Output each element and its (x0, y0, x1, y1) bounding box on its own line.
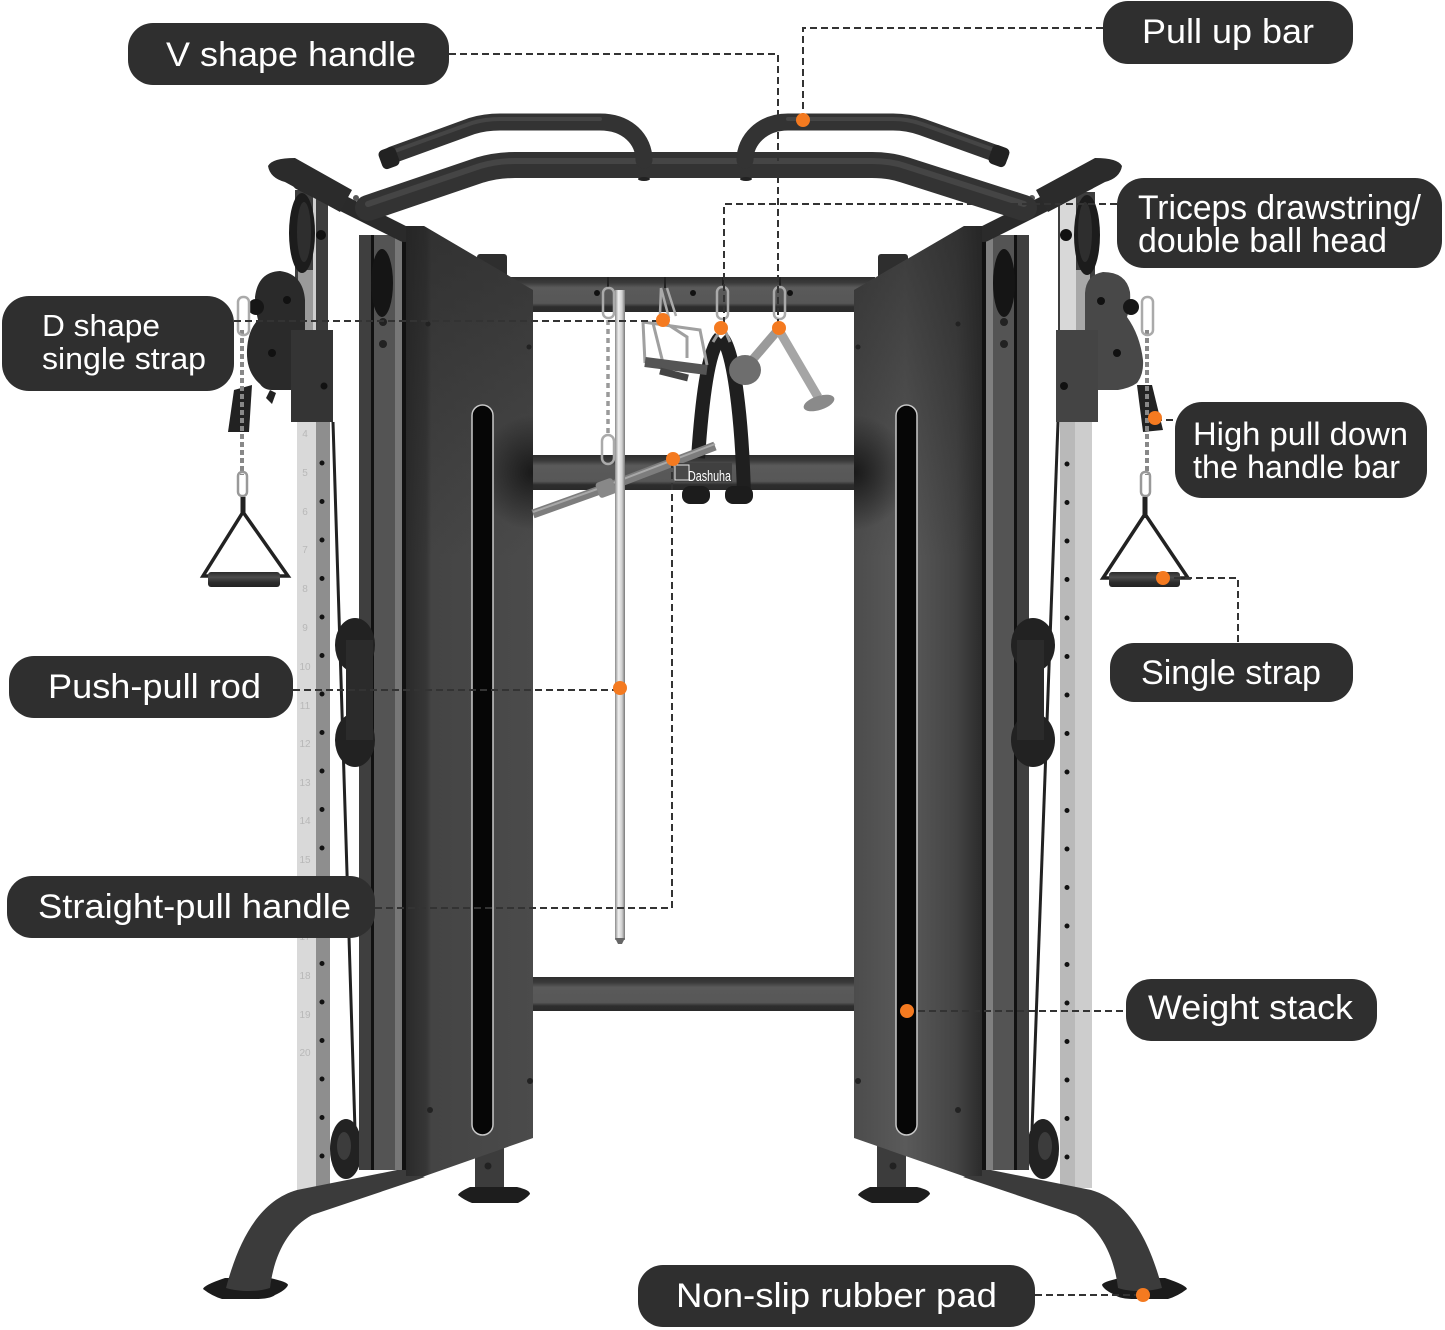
right chain and single strap handle (1103, 297, 1188, 587)
left cable column: 13 (299, 778, 311, 789)
leader line: D shape single strap (234, 320, 663, 322)
right pulley carriage (1056, 272, 1163, 432)
leader line: weight stack (907, 1010, 1126, 1012)
right front panel (854, 226, 982, 1176)
pull up bar (368, 119, 1024, 208)
leader line: single strap (1163, 578, 1238, 643)
left cable column: 14 (299, 816, 311, 827)
label: Non-slip rubber pad (638, 1265, 1035, 1327)
label: D shape single strap (2, 296, 234, 391)
dot: triceps (714, 321, 728, 335)
brand logo (675, 463, 732, 485)
back crossbars (477, 254, 908, 1011)
left cable column: 11 (300, 701, 311, 712)
label: Triceps drawstring: Triceps drawstring/ (1138, 189, 1422, 227)
brand logo: Dashuha (688, 468, 731, 485)
label: Pull up bar: Pull up bar (1142, 13, 1314, 51)
left front panel (406, 226, 533, 1176)
left cable column: 6 (302, 507, 308, 518)
triceps rope double ball head (682, 338, 720, 504)
D shape single strap handle (643, 277, 707, 378)
left cable column: 5 (302, 468, 308, 479)
label: V shape handle: V shape handle (166, 36, 416, 74)
dot: straight-pull handle (666, 452, 680, 466)
V shape handle (729, 277, 836, 415)
label: V shape handle (128, 23, 449, 85)
left corner arm (268, 158, 404, 234)
triceps hook (713, 277, 730, 342)
right floating pulleys (1011, 618, 1055, 767)
label: Push-pull rod: Push-pull rod (48, 668, 261, 706)
push-pull rod (615, 290, 625, 944)
leader line: triceps drawstring (724, 204, 1117, 328)
label: Straight-pull handle (7, 876, 375, 938)
left cable column: 19 (299, 1010, 311, 1021)
leader line: high pull down (1155, 419, 1175, 421)
dot: rubber pad (1136, 1288, 1150, 1302)
label: Non-slip rubber pad: Non-slip rubber pad (676, 1277, 997, 1315)
label: Straight-pull handle: Straight-pull handle (38, 888, 351, 926)
left cable column: 9 (302, 623, 308, 634)
right weight column (982, 235, 1029, 1170)
left floating pulleys (335, 618, 375, 767)
leader line: straight-pull handle (375, 460, 672, 908)
label: High pull down the handle bar: the handle bar (1193, 449, 1400, 485)
left cable column (289, 190, 362, 1192)
straight pull handle (533, 444, 715, 514)
dot: single strap (1156, 571, 1170, 585)
left cable column: 18 (299, 971, 311, 982)
label: Single strap (1110, 643, 1353, 702)
left front leg (203, 1168, 425, 1299)
label: High pull down the handle bar: High pull down (1193, 416, 1408, 452)
leader line: V shape handle (449, 54, 778, 328)
label: Single strap: Single strap (1141, 654, 1321, 692)
label: Push-pull rod (9, 656, 293, 718)
left chain and single strap handle (203, 297, 288, 587)
dot: high pull down (1148, 411, 1162, 425)
label: Triceps drawstring (1117, 178, 1442, 268)
label: Weight stack (1126, 979, 1377, 1041)
leader line: push-pull rod (293, 689, 620, 691)
left cable column: 8 (302, 584, 308, 595)
dot: weight stack (900, 1004, 914, 1018)
rod chain (602, 277, 614, 464)
label: Triceps drawstring: double ball head (1138, 222, 1387, 260)
left cable column: 17 (299, 932, 311, 943)
left weight column (359, 235, 406, 1170)
left cable column: 7 (302, 545, 308, 556)
right front leg (963, 1168, 1187, 1299)
dot: pull up bar (796, 113, 810, 127)
left pulley carriage (228, 271, 333, 432)
left cable column: 20 (299, 1048, 311, 1059)
leader line: rubber pad (1035, 1294, 1143, 1296)
left cable column: 15 (299, 855, 311, 866)
label: D shape single strap: D shape (42, 308, 160, 343)
left cable column: 10 (299, 662, 311, 673)
left cable column: 12 (299, 739, 311, 750)
left cable column: 16 (299, 894, 311, 905)
triceps rope front leg (722, 338, 753, 504)
label: Pull up bar (1103, 1, 1353, 64)
marker dots (613, 113, 1170, 1302)
label: High pull down the handle bar (1175, 402, 1427, 498)
leader line: pull up bar (803, 28, 1103, 120)
dot: D shape strap (656, 313, 670, 327)
dot: V handle (772, 321, 786, 335)
right corner arm (984, 158, 1122, 234)
left cable column: 4 (302, 429, 308, 440)
label: D shape single strap: single strap (42, 341, 206, 376)
back legs (458, 1145, 930, 1203)
right cable column (1027, 192, 1100, 1192)
label: Weight stack: Weight stack (1148, 989, 1354, 1027)
dot: push-pull rod (613, 681, 627, 695)
gym machine frame (203, 119, 1188, 1299)
